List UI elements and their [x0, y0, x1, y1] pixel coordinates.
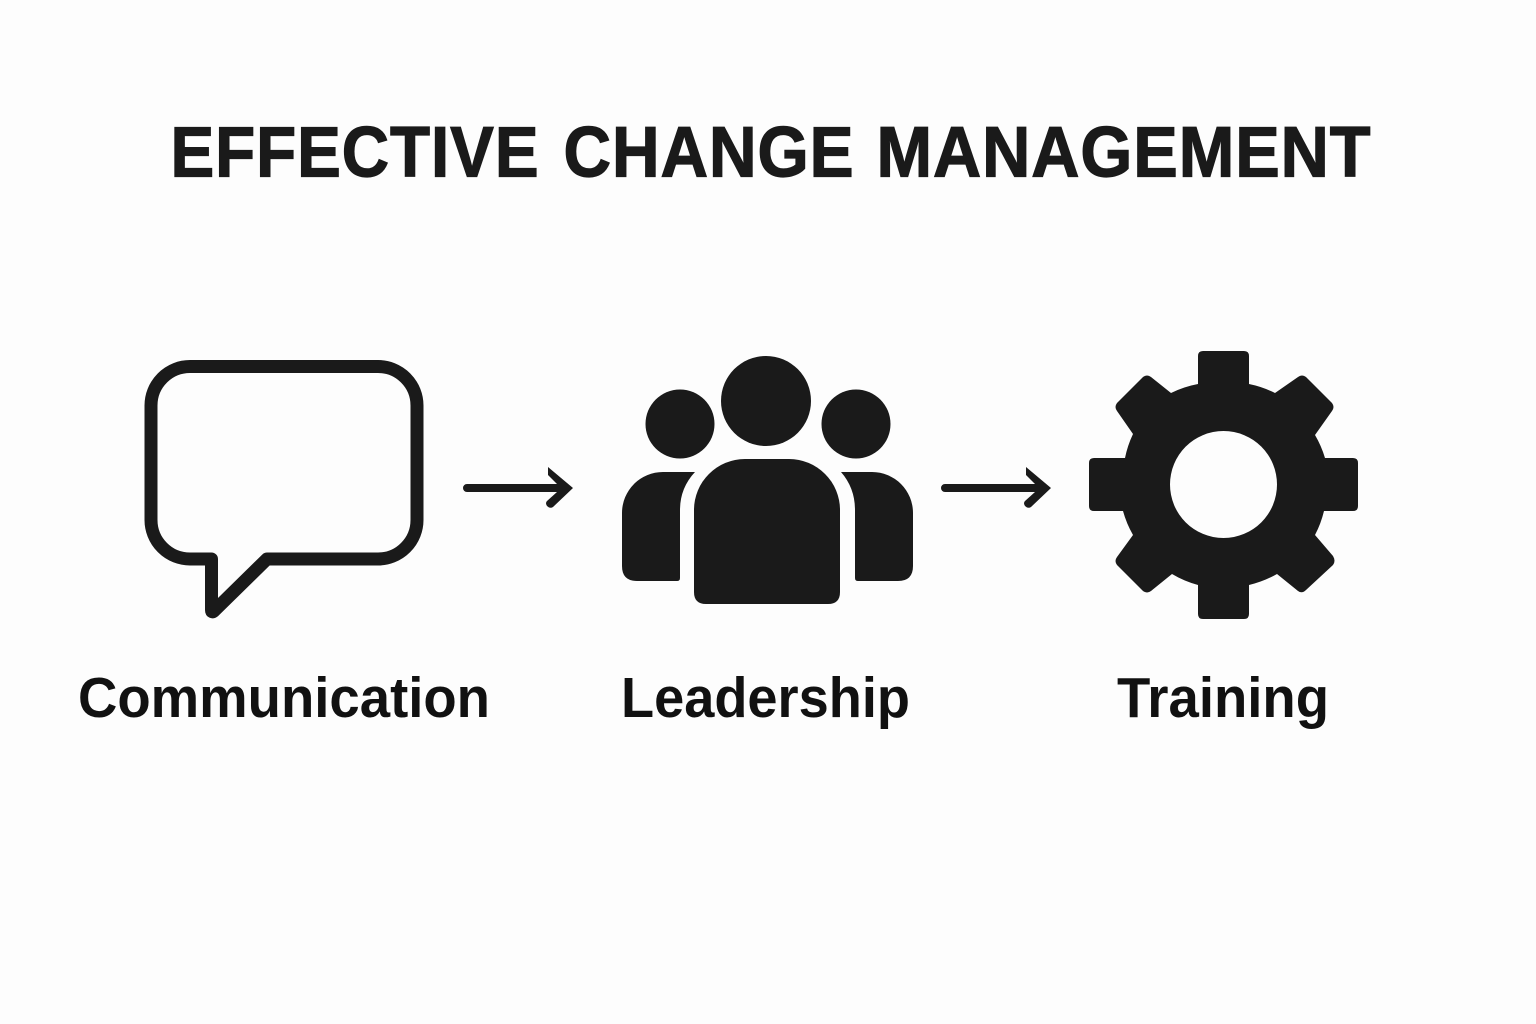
icon: three people	[622, 356, 913, 604]
title	[170, 114, 1372, 192]
icon: gear	[1089, 351, 1358, 619]
title: EFFECTIVE	[170, 114, 540, 192]
label: Leadership: Leadership	[621, 666, 910, 730]
title: MANAGEMENT	[876, 114, 1372, 192]
arrow: communication to leadership	[463, 467, 573, 508]
icon: speech bubble	[151, 366, 417, 612]
label: Training: Training	[1117, 666, 1329, 730]
title: CHANGE	[564, 114, 854, 192]
arrow: leadership to training	[941, 467, 1051, 508]
label: Communication: Communication	[78, 666, 490, 730]
